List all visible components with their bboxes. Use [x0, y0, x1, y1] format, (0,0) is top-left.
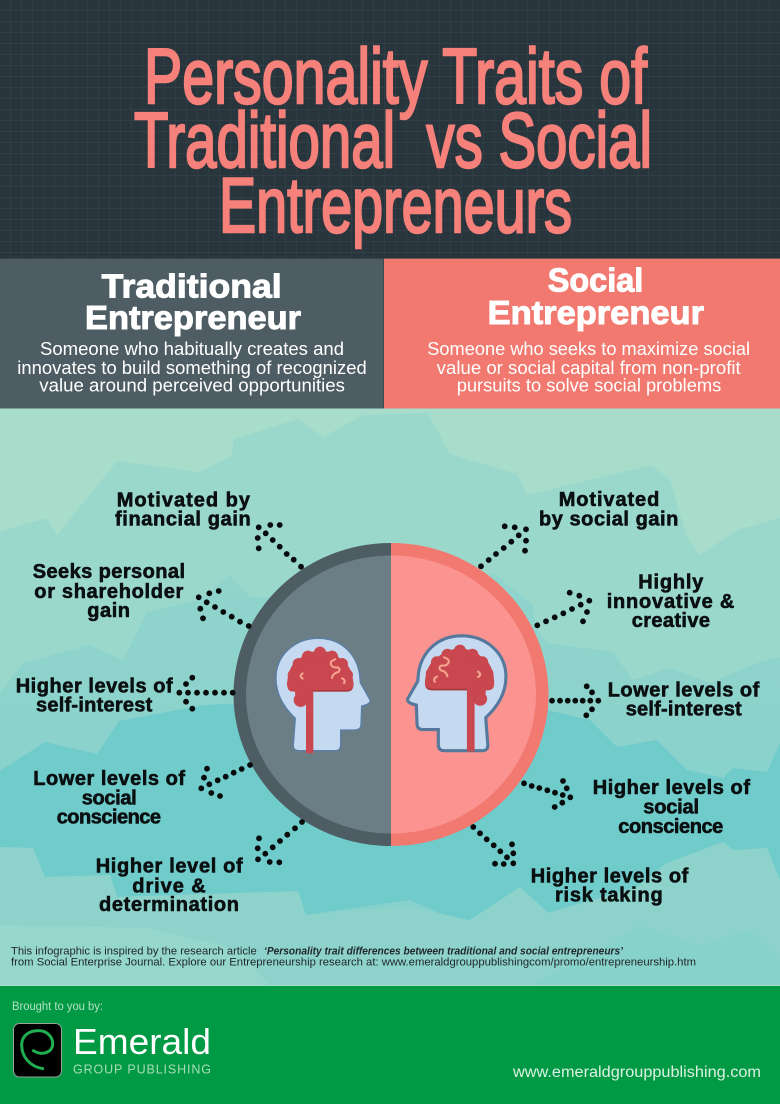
label: highly innovative and creative: Highly [638, 572, 704, 594]
label: seeks personal or shareholder gain [33, 561, 185, 622]
label: highly innovative and creative: innovative & [607, 591, 734, 613]
label: seeks personal or shareholder gain: gain [87, 600, 130, 622]
arrow: shareholder gain [199, 591, 249, 626]
icon: left head with brain [276, 638, 370, 753]
label: higher levels of social conscience [593, 777, 750, 838]
arrow: drive and determination [258, 822, 302, 862]
panel: traditional entrepreneur: Traditional [102, 268, 282, 305]
label: higher levels of social conscience: conscience [618, 816, 723, 838]
label: lower levels of self-interest: self-interest [626, 699, 742, 721]
label: motivated by social gain: Motivated [559, 489, 659, 511]
logo: emerald swirl [14, 1024, 62, 1077]
label: motivated by financial gain: Motivated by [117, 490, 251, 512]
label: higher level of drive and determination: drive & [132, 875, 206, 897]
logo wordmark: Emerald [73, 1021, 211, 1062]
label: lower levels of social conscience: Lower levels of [33, 768, 185, 790]
arrow: risk taking [473, 827, 513, 864]
panel: social entrepreneur [384, 259, 780, 409]
source note [11, 945, 696, 968]
label: higher level of drive and determination [96, 856, 243, 916]
arrow: higher social conscience [524, 781, 570, 807]
label: higher level of drive and determination: determination [99, 894, 239, 916]
label: motivated by social gain: by social gain [539, 509, 678, 531]
label: higher levels of self-interest: self-interest [36, 695, 153, 717]
label: motivated by financial gain: financial gain [115, 509, 251, 531]
source note: This infographic is inspired by the research article [11, 945, 257, 957]
credit line: Brought to you by: [12, 1001, 103, 1013]
source note: ‘Personality trait differences between traditional and social entrepreneurs’ [264, 945, 624, 957]
circle: split comparison [234, 543, 548, 846]
label: lower levels of self-interest: Lower levels of [608, 680, 760, 702]
title: Entrepreneurs [219, 161, 572, 249]
panel: social entrepreneur: Someone who seeks to maximize social [427, 338, 750, 359]
label: motivated by social gain [539, 489, 678, 531]
label: higher levels of social conscience: social [643, 797, 699, 819]
label: seeks personal or shareholder gain: Seeks personal [33, 561, 185, 583]
panel: traditional entrepreneur: value around perceived opportunities [39, 375, 345, 396]
panel: traditional entrepreneur: innovates to build something of recognized [17, 357, 367, 378]
title [134, 32, 652, 249]
panel: social entrepreneur: pursuits to solve social problems [457, 375, 721, 396]
label: seeks personal or shareholder gain: or shareholder [34, 581, 184, 603]
arrow: innovative [537, 593, 589, 625]
label: lower levels of social conscience: social [82, 787, 137, 809]
label: lower levels of social conscience [33, 768, 185, 828]
panel: traditional entrepreneur: Entrepreneur [85, 299, 301, 336]
icon: right head with brain [408, 636, 506, 751]
label: higher levels of risk taking [531, 865, 689, 907]
website url: www.emeraldgrouppublishing.com [512, 1064, 761, 1081]
label: higher levels of self-interest [16, 675, 173, 717]
label: lower levels of self-interest [608, 680, 760, 721]
arrow: social gain [481, 526, 526, 566]
label: highly innovative and creative [607, 572, 734, 632]
arrow: lower social conscience [201, 765, 250, 796]
footer band [0, 985, 780, 1104]
source note: from Social Enterprise Journal. Explore our Entrepreneurship research at: www.emeraldgrouppublishingcom/promo/entrepreneurship.htm [11, 956, 696, 968]
arrow: lower self-interest [552, 686, 598, 715]
label: lower levels of social conscience: conscience [57, 806, 161, 828]
label: higher levels of self-interest: Higher levels of [16, 675, 173, 697]
label: motivated by financial gain [115, 490, 251, 531]
label: highly innovative and creative: creative [632, 610, 710, 632]
panel: social entrepreneur: Social [548, 262, 643, 299]
title banner [0, 0, 780, 259]
label: higher levels of risk taking: risk taking [555, 885, 663, 907]
arrow: financial gain [258, 525, 301, 567]
panel: traditional entrepreneur: Someone who habitually creates and [40, 338, 344, 359]
label: higher levels of risk taking: Higher levels of [531, 865, 689, 887]
panel: social entrepreneur: Entrepreneur [488, 294, 704, 331]
arrow: higher self-interest [179, 678, 233, 709]
label: higher level of drive and determination: Higher level of [96, 856, 243, 878]
logo wordmark: GROUP PUBLISHING [73, 1062, 211, 1076]
panel: traditional entrepreneur [0, 259, 384, 409]
faceted teal background [0, 408, 780, 986]
label: higher levels of social conscience: Higher levels of [593, 777, 750, 799]
panel: social entrepreneur: value or social capital from non-profit [437, 357, 741, 378]
